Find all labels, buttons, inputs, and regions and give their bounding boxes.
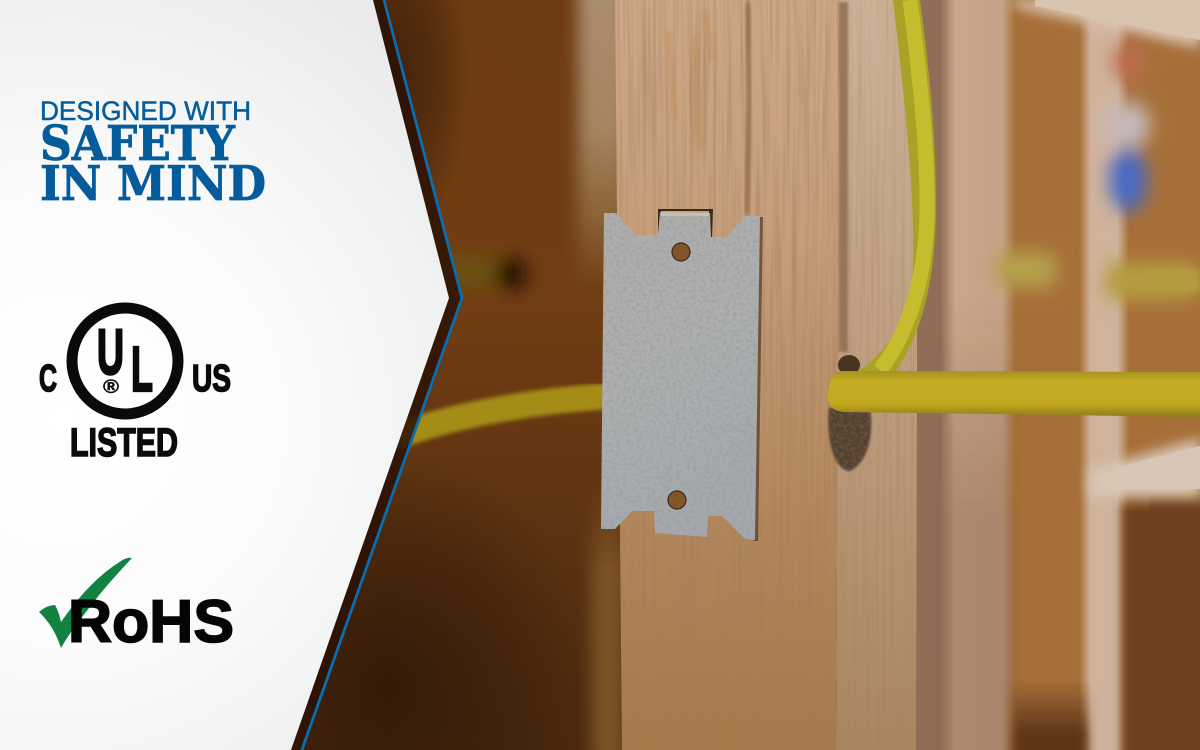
dark chevron band behind panel <box>290 0 462 750</box>
wooden stud front face <box>615 0 840 750</box>
blurred hole in background stud <box>440 252 526 292</box>
green check mark <box>39 558 132 648</box>
upper shelf <box>1010 0 1200 48</box>
US label: US <box>192 358 231 400</box>
UL letter U: U <box>97 316 124 388</box>
blurred coloured objects on the right <box>995 42 1200 300</box>
blue chevron line <box>300 0 464 750</box>
yellow cable curving down <box>855 0 936 373</box>
heading line: designed with: DESIGNED WITH <box>40 96 251 126</box>
yellow cable left of plate, out of focus <box>395 396 610 437</box>
drilled hole <box>828 355 871 471</box>
wooden stud side face <box>836 0 918 750</box>
LISTED label: LISTED <box>70 421 178 465</box>
RoHS label: RoHS <box>68 588 234 655</box>
metal protector plate <box>601 209 763 541</box>
blurred right background framing <box>905 0 1200 750</box>
c label: C <box>39 358 57 400</box>
blurred pale post beside the stud <box>578 0 628 750</box>
lower shelf area <box>1122 492 1200 750</box>
orange grain streaks <box>668 10 712 150</box>
yellow cable horizontal <box>828 371 1200 417</box>
registered mark: ® <box>103 377 119 398</box>
heading line: in mind: IN MIND <box>40 156 266 212</box>
white chevron panel <box>0 0 449 750</box>
heading <box>40 96 266 212</box>
dark grain line <box>746 2 750 215</box>
UL letter L: L <box>131 333 153 405</box>
icon: UL listed certification mark <box>39 308 231 465</box>
dark left background shading <box>300 0 590 750</box>
heading line: safety: SAFETY <box>40 116 236 172</box>
icon: RoHS compliance mark <box>39 558 234 655</box>
lower screw hole <box>668 491 686 509</box>
upper screw hole <box>672 243 690 261</box>
